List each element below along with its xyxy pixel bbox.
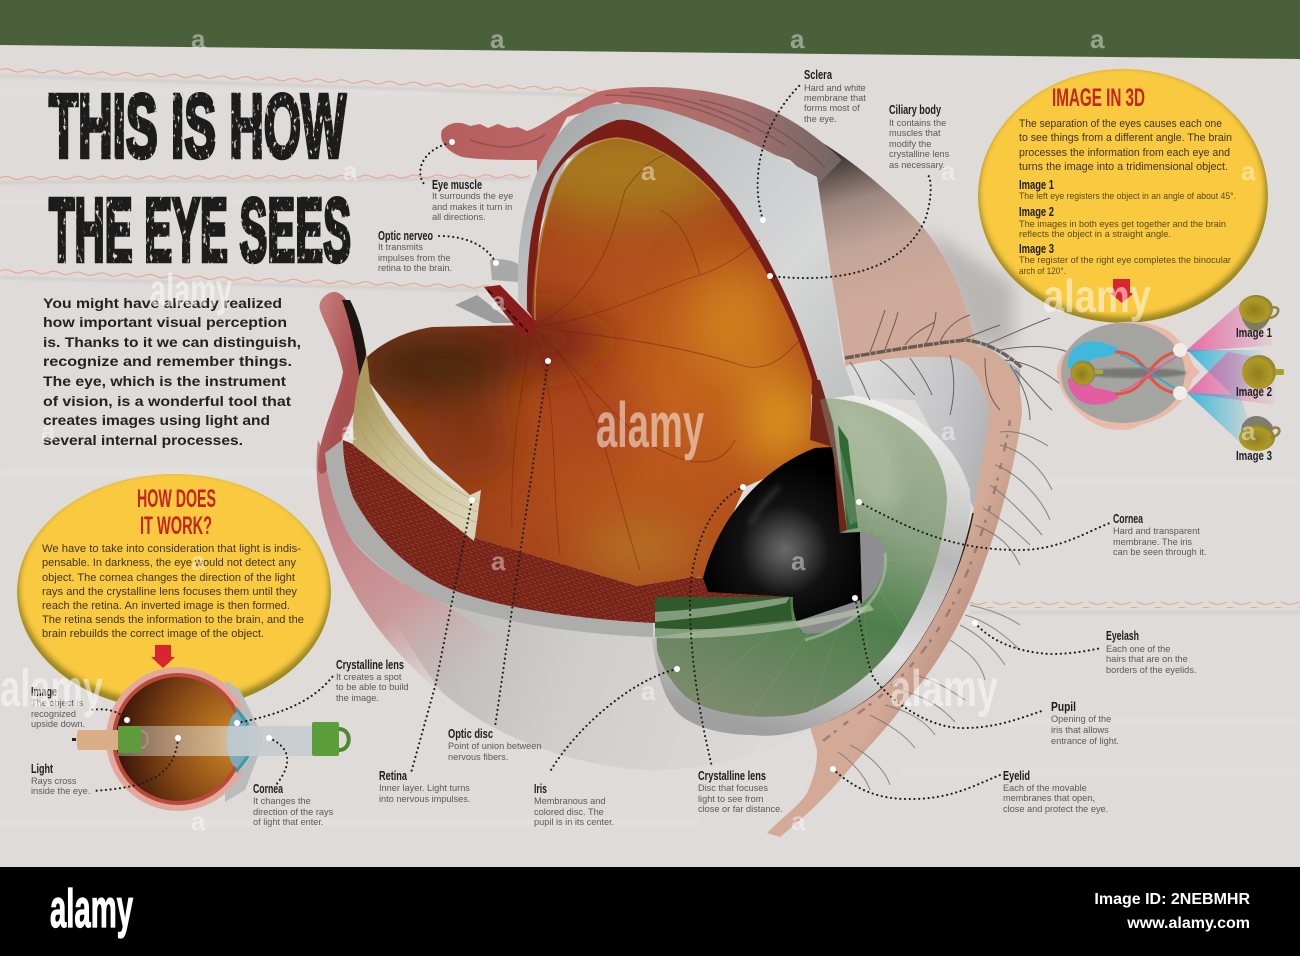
intro paragraph: several internal processes.	[43, 433, 243, 448]
label: eye muscle: all directions.	[432, 212, 486, 222]
label: optic nerve: It transmits	[378, 242, 423, 252]
lid roots	[822, 420, 1010, 742]
intro paragraph: is. Thanks to it we can distinguish,	[43, 335, 301, 350]
eyelashes	[822, 310, 1068, 790]
pupil grey edge	[860, 532, 885, 602]
body text: We have to take into consideration that light is indis-	[42, 543, 301, 555]
label: image 2: Image 2	[1236, 385, 1272, 399]
label: image: Image	[31, 685, 57, 699]
label: eyelash: Eyelash	[1106, 629, 1139, 643]
body text: pensable. In darkness, the eye would not detect any	[42, 557, 297, 569]
sclera cut face, upper	[518, 104, 855, 400]
label: eyelash: Each one of the	[1106, 644, 1170, 654]
watermarks: a	[791, 806, 806, 836]
intro text: turns the image into a tridimensional object.	[1019, 161, 1228, 173]
label: iris: Membranous and	[534, 796, 606, 806]
sclera strip at cornea	[820, 398, 860, 525]
image 3 note	[1019, 242, 1231, 276]
label: iris: colored disc. The	[534, 807, 604, 817]
top green band	[0, 0, 1300, 59]
label: eye muscle: It surrounds the eye	[432, 191, 513, 201]
label: cornea right: membrane. The iris	[1113, 537, 1192, 547]
image 1 note: The left eye registers the object in an angle of about 45°.	[1019, 191, 1236, 201]
sclera wedge	[225, 680, 262, 802]
retina top rim	[535, 138, 720, 320]
retina base	[360, 130, 840, 600]
watermarks: a	[191, 806, 206, 836]
retina golden glows	[535, 260, 815, 575]
nerve stub	[72, 730, 118, 750]
intro paragraph	[43, 296, 301, 448]
panel: image in 3D	[978, 67, 1268, 323]
eye interior	[116, 677, 240, 801]
label: eye muscle: Eye muscle	[432, 178, 482, 192]
retina top tint	[542, 138, 728, 240]
watermarks: a	[790, 24, 805, 54]
muscle, upper band	[441, 87, 842, 185]
image 2 note: The images in both eyes get together and the brain	[1019, 219, 1226, 229]
retinal veins	[410, 155, 800, 570]
bowl red band	[343, 440, 793, 623]
watermarks: a	[490, 24, 505, 54]
label: optic disc: Optic disc	[448, 727, 493, 741]
icon: red arrow	[151, 645, 175, 668]
bottom black band	[0, 867, 1300, 956]
watermarks: a	[191, 24, 206, 54]
label: optic nerve: retina to the brain.	[378, 263, 452, 273]
green iris strip	[838, 425, 858, 530]
intro paragraph: creates images using light and	[43, 413, 270, 428]
label: crystalline lens main: Disc that focuses	[698, 783, 768, 793]
body text: rays and the crystalline lens focuses them until they	[42, 586, 298, 598]
iris fibres	[690, 410, 945, 715]
label: light: inside the eye.	[31, 786, 90, 796]
watermarks: a	[41, 416, 56, 446]
muscle, left	[318, 292, 366, 474]
cornea and lens	[227, 708, 254, 772]
watermarks: a	[1241, 156, 1256, 186]
cornea ring	[652, 394, 970, 736]
inverted mug	[118, 726, 148, 753]
label: crystalline lens small: Crystalline lens	[336, 658, 404, 672]
body text: The retina sends the information to the brain, and the	[42, 614, 304, 626]
watermarks: alamy	[1043, 270, 1151, 322]
label: eyelid: Eyelid	[1003, 769, 1030, 783]
label: sclera: Hard and white	[804, 83, 866, 93]
optic nerve sheath	[490, 259, 518, 282]
intro paragraph: recognize and remember things.	[43, 354, 292, 369]
label: image 3: Image 3	[1236, 449, 1272, 463]
sclera, pale lower region	[823, 345, 1020, 510]
label: crystalline lens small	[336, 658, 409, 703]
label: ciliary body	[889, 103, 950, 170]
label: ciliary body: as necessary.	[889, 160, 945, 170]
brain centre shading	[1083, 368, 1187, 378]
label: cornea small: direction of the rays	[253, 807, 334, 817]
label: cornea small: of light that enter.	[253, 817, 324, 827]
label: eyelid: membranes that open,	[1003, 793, 1095, 803]
label: sclera: Sclera	[804, 68, 833, 82]
intro text	[1019, 118, 1232, 173]
body text: object. The cornea changes the direction of the light	[42, 572, 295, 584]
outer shading beyond the sclera	[925, 228, 1013, 350]
intro paragraph: of vision, is a wonderful tool that	[43, 394, 292, 409]
intro text: processes the information from each eye and	[1019, 147, 1230, 159]
label: cornea right: can be seen through it.	[1113, 547, 1206, 557]
title: THIS IS HOW	[49, 77, 346, 177]
label: image: recognized	[31, 709, 76, 719]
image 2 note: Image 2	[1019, 205, 1054, 219]
shell lower surface	[345, 390, 980, 770]
label: ciliary body: muscles that	[889, 128, 941, 138]
label: crystalline lens main: light to see from	[698, 794, 764, 804]
intro paragraph: You might have already realized	[43, 296, 282, 311]
label: pupil: entrance of light.	[1051, 736, 1119, 746]
body text	[42, 543, 304, 640]
body text: reach the retina. An inverted image is then formed.	[42, 600, 290, 612]
text: THE EYE SEES	[49, 181, 351, 281]
label: iris: Iris	[534, 782, 547, 796]
label: light: Rays cross	[31, 776, 77, 786]
label: eyelid	[1003, 769, 1108, 814]
label: sclera: the eye.	[804, 114, 837, 124]
label: ciliary body: Ciliary body	[889, 103, 941, 117]
lower iris cut	[655, 597, 792, 637]
ciliary body upper	[810, 380, 847, 533]
label: image: The object is	[31, 698, 83, 708]
label: image: upside down.	[31, 719, 85, 729]
choroid ring	[112, 673, 244, 805]
heading: HOW DOES	[137, 485, 216, 513]
watermarks: a	[1090, 24, 1105, 54]
label: ciliary body: crystalline lens	[889, 149, 950, 159]
body text: brain rebuilds the correct image of the object.	[42, 628, 264, 640]
cream band fibres	[354, 380, 478, 522]
label: pupil: Pupil	[1051, 700, 1076, 714]
label: crystalline lens main: Crystalline lens	[698, 769, 766, 783]
image 3 note: Image 3	[1019, 242, 1054, 256]
label: optic nerve	[378, 229, 452, 273]
shell pink rim	[317, 440, 500, 722]
brain	[1061, 323, 1185, 423]
label: eyelid: Each of the movable	[1003, 783, 1087, 793]
intro text: The separation of the eyes causes each one	[1019, 118, 1222, 130]
label: pupil	[1051, 700, 1119, 746]
heading	[137, 485, 216, 540]
eyes	[1173, 343, 1187, 400]
iris inner rim	[805, 553, 886, 640]
panel: how does it work	[17, 471, 331, 710]
label: light: Light	[31, 762, 54, 776]
optic nerve stripes	[488, 290, 528, 332]
label: eyelid: close and protect the eye.	[1003, 804, 1108, 814]
label: crystalline lens small: the image.	[336, 693, 379, 703]
label: optic disc: Point of union between	[448, 741, 541, 751]
footer logo: alamy	[50, 879, 133, 939]
marker dots	[124, 139, 978, 772]
label: iris	[534, 782, 614, 827]
pupil lower grey	[795, 600, 862, 634]
heading: IMAGE IN 3D	[1052, 84, 1145, 112]
lower bowl grey band	[325, 440, 653, 637]
sclera surface, upper right	[780, 122, 978, 362]
visual cortex regions	[1068, 341, 1118, 405]
label: optic disc	[448, 727, 541, 762]
muscle fibres	[470, 92, 825, 168]
light beam	[118, 726, 312, 756]
brain diagram	[1057, 303, 1275, 447]
label: eyelash: borders of the eyelids.	[1106, 665, 1196, 675]
label: crystalline lens small: to be able to build	[336, 682, 409, 692]
label: eye muscle: and makes it turn in	[432, 202, 512, 212]
watermarks: a	[941, 156, 956, 186]
label: sclera: membrane that	[804, 93, 866, 103]
iris	[655, 398, 947, 717]
mental cup	[1071, 361, 1103, 385]
label: image	[31, 685, 85, 729]
label: optic disc: nervous fibers.	[448, 752, 508, 762]
label: ciliary body: It contains the	[889, 118, 946, 128]
label: eye muscle	[432, 178, 513, 222]
label: optic nerve: impulses from the	[378, 253, 451, 263]
label: cornea small: Cornea	[253, 782, 284, 796]
watermarks: a	[1241, 416, 1256, 446]
icon: red arrow	[1110, 279, 1134, 303]
intro text: to see things from a different angle. The brain	[1019, 132, 1232, 144]
watermarks: a	[491, 546, 506, 576]
watermarks: alamy	[0, 660, 103, 718]
watermarks: a	[791, 546, 806, 576]
watermarks: alamy	[150, 264, 232, 316]
label: image 1: Image 1	[1236, 326, 1272, 340]
watermarks: alamy	[596, 389, 704, 461]
upper eyelid and side lid	[767, 344, 1022, 837]
label: sclera: forms most of	[804, 103, 860, 113]
label: retina	[379, 769, 470, 804]
cup: image 1	[1239, 295, 1278, 331]
footer url: www.alamy.com	[1126, 915, 1250, 932]
retina dark centre and bowl	[345, 308, 610, 480]
label: cornea right: Hard and transparent	[1113, 526, 1200, 536]
green mug	[312, 722, 349, 756]
intro paragraph: how important visual perception	[43, 315, 287, 330]
label: cornea right: Cornea	[1113, 512, 1144, 526]
watermarks: a	[641, 156, 656, 186]
label: retina: into nervous impulses.	[379, 794, 470, 804]
label: retina: Retina	[379, 769, 408, 783]
label: sclera	[804, 68, 866, 124]
cup: image 3	[1239, 416, 1279, 451]
heading: IT WORK?	[140, 512, 212, 540]
title	[49, 77, 351, 281]
pale iris highlight	[830, 400, 900, 510]
view rays	[1187, 303, 1275, 447]
optic nerve fibres	[484, 285, 536, 333]
black line at lid edge	[810, 513, 973, 727]
lens highlight	[750, 487, 780, 525]
watermarks: alamy	[890, 660, 998, 718]
label: eyelash	[1106, 629, 1196, 675]
label: cornea small	[253, 782, 334, 827]
image 1 note	[1019, 178, 1236, 201]
footer image id: Image ID: 2NEBMHR	[1094, 891, 1250, 908]
label: pupil: iris that allows	[1051, 725, 1109, 735]
watermarks: a	[191, 546, 206, 576]
choroid, upper brick layer	[527, 120, 822, 395]
crystalline lens	[703, 447, 862, 634]
label: optic nerve: Optic nerveo	[378, 229, 433, 243]
outer eye layers	[106, 667, 250, 811]
background streaks	[0, 90, 1300, 825]
cup: image 2	[1242, 355, 1284, 389]
label: crystalline lens main	[698, 769, 783, 814]
watermarks: a	[941, 416, 956, 446]
label: crystalline lens small: It creates a spot	[336, 672, 402, 682]
label: cornea small: It changes the	[253, 796, 311, 806]
retina	[345, 120, 840, 600]
image 3 note: The register of the right eye completes the binocular	[1019, 255, 1231, 265]
eye	[317, 87, 1022, 837]
yellow ellipse	[17, 471, 331, 710]
watermarks: a	[641, 676, 656, 706]
image 3 note: arch of 120°.	[1019, 266, 1066, 276]
watermarks: a	[491, 286, 506, 316]
optic nerve lower sheath	[455, 295, 513, 323]
image 2 note: reflects the object in a straight angle.	[1019, 229, 1171, 239]
red wavy lines	[0, 67, 1300, 614]
cream band	[353, 355, 481, 541]
translucent iris bars	[655, 597, 874, 638]
intro paragraph: The eye, which is the instrument	[43, 374, 287, 389]
label: pupil: Opening of the	[1051, 714, 1111, 724]
watermarks: a	[341, 416, 356, 446]
label: cornea right	[1113, 512, 1206, 557]
label: iris: pupil is in its center.	[534, 817, 614, 827]
small eye diagram	[72, 667, 349, 811]
label: retina: Inner layer. Light turns	[379, 783, 470, 793]
optic pathways	[1115, 350, 1185, 394]
label: ciliary body: modify the	[889, 139, 931, 149]
image 2 note	[1019, 205, 1226, 239]
image 1 note: Image 1	[1019, 178, 1054, 192]
label: light	[31, 762, 90, 796]
watermarks: a	[343, 156, 358, 186]
label: eyelash: hairs that are on the	[1106, 654, 1188, 664]
yellow ellipse	[978, 67, 1268, 323]
head outline	[1057, 322, 1200, 430]
leader lines	[90, 85, 1110, 799]
muscle shadow	[342, 300, 366, 380]
label: crystalline lens main: close or far distance.	[698, 804, 783, 814]
